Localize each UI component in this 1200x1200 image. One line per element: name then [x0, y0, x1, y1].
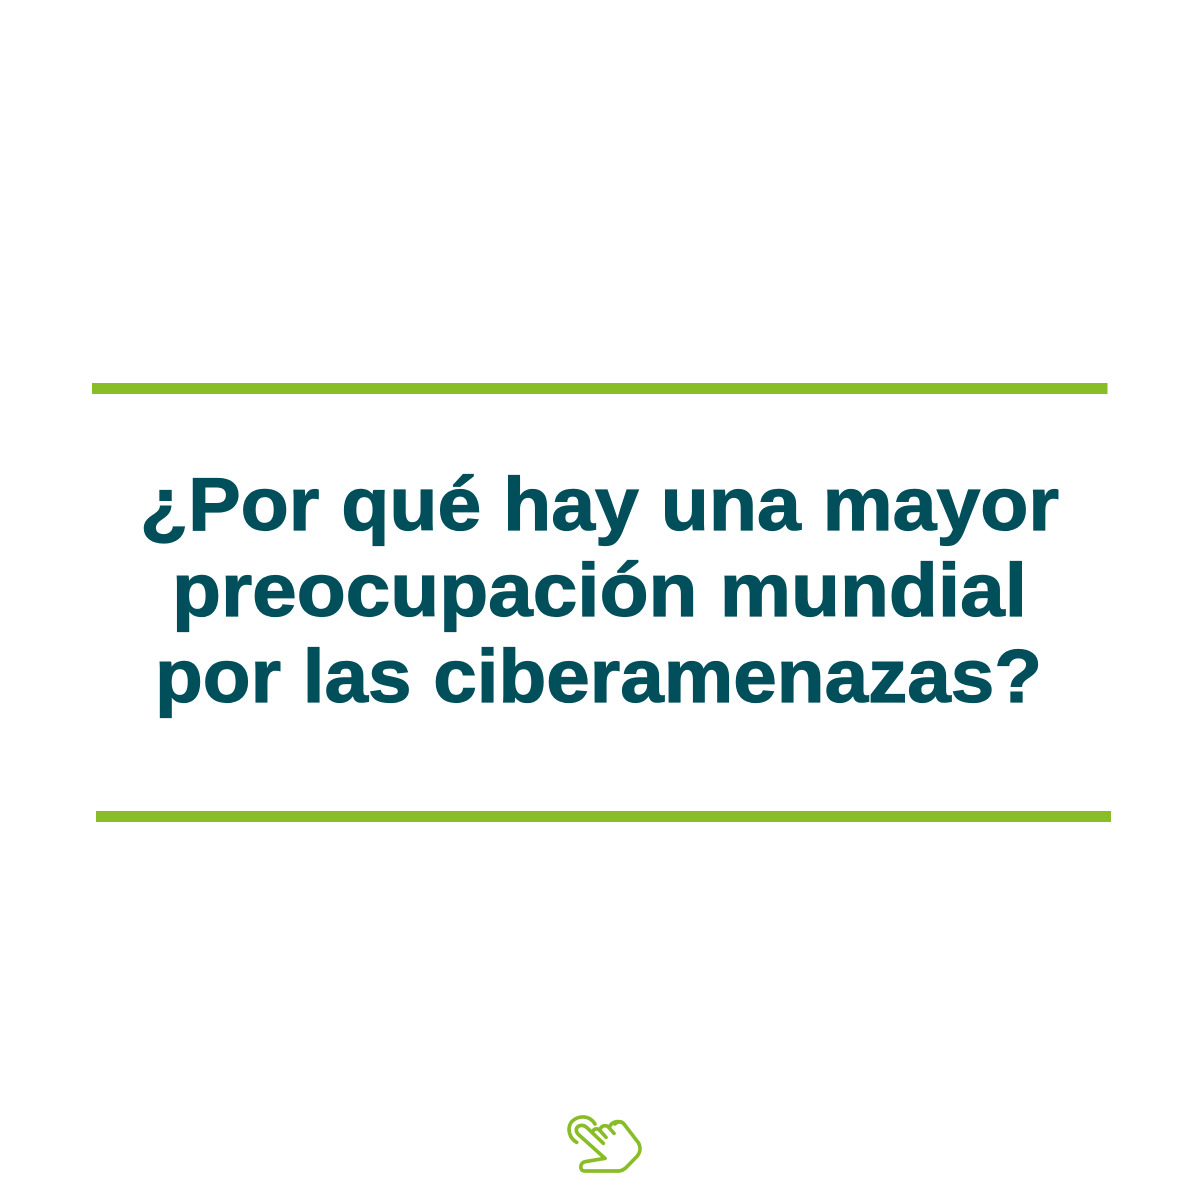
title: por las ciberamenazas? [155, 634, 1042, 718]
title: preocupación mundial [172, 548, 1027, 632]
title [140, 462, 1059, 718]
title: ¿Por qué hay una mayor [140, 462, 1059, 546]
icon: pointing hand tapping [569, 1117, 640, 1171]
top green bar [92, 383, 1108, 394]
bottom green bar [96, 811, 1111, 822]
